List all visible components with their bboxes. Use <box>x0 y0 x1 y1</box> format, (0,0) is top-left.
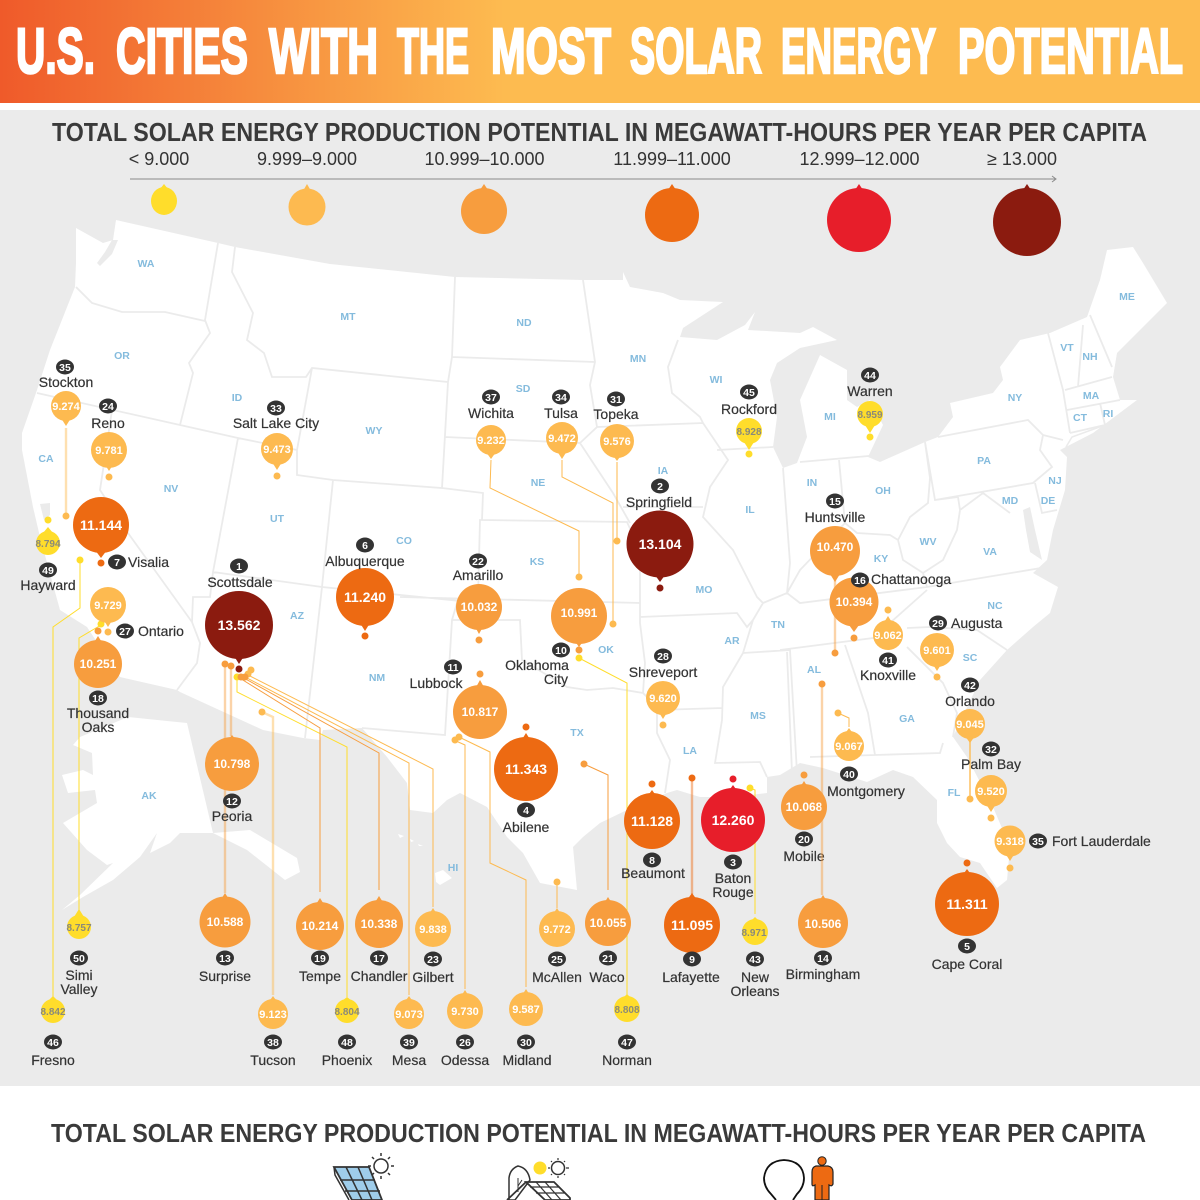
pin: 44 Warren: 8.959 <box>857 410 883 421</box>
pin: 6 Albuquerque: 11.240 <box>344 589 386 605</box>
pin: 40 Montgomery: Montgomery <box>827 783 905 799</box>
state labels: WY <box>366 425 382 437</box>
pin: 19 Tempe: 19 <box>314 953 326 965</box>
pin: 3 Baton Rouge: 12.260 <box>712 812 755 828</box>
pin: 9 Lafayette: Lafayette <box>662 969 720 985</box>
title: THE <box>397 15 469 87</box>
pin: 2 Springfield: 13.104 <box>639 536 682 552</box>
pin: 14 Birmingham: 14 <box>817 953 829 965</box>
pin: 5 Cape Coral: 11.311 <box>946 896 988 912</box>
pin: 6 Albuquerque <box>325 538 405 640</box>
pin: 33 Salt Lake City: 33 <box>270 403 282 415</box>
pin: 42 Orlando: 9.045 <box>956 719 984 731</box>
state labels: MS <box>750 710 766 722</box>
pin: 28 Shreveport: 9.620 <box>649 693 677 705</box>
pin: 26 Odessa: Odessa <box>441 1052 489 1068</box>
state labels: IN <box>807 477 817 489</box>
state labels: AR <box>724 635 740 647</box>
state labels: VA <box>983 546 997 558</box>
pin: 43 New Orleans: 8.971 <box>741 928 767 939</box>
state labels: NM <box>369 672 385 684</box>
pin: 48 Phoenix: 8.804 <box>334 1007 360 1018</box>
pin: 3 Baton Rouge: Rouge <box>712 884 754 900</box>
state labels: AK <box>141 790 157 802</box>
pin: 39 Mesa <box>244 670 426 1068</box>
state labels: MN <box>630 353 646 365</box>
pin: 15 Huntsville: 15 <box>829 496 841 508</box>
pin: 42 Orlando <box>945 678 995 802</box>
pin: 21 Waco: 21 <box>602 953 614 965</box>
pin: 37 Wichita: Wichita <box>468 405 514 421</box>
state labels: NV <box>164 483 178 495</box>
pin: 12 Peoria <box>205 662 259 824</box>
state labels: AZ <box>290 610 305 622</box>
pin: 46 Fresno: 46 <box>47 1037 59 1049</box>
pin: 45 Rockford <box>721 384 777 458</box>
pin: 12 Peoria: 10.798 <box>214 757 251 771</box>
pin: 35 Stockton <box>39 360 93 520</box>
pin: 32 Palm Bay: Palm Bay <box>961 756 1021 772</box>
pin: 48 Phoenix: Phoenix <box>322 1052 372 1068</box>
pin: 17 Chandler: Chandler <box>351 968 408 984</box>
state labels: SC <box>963 652 978 664</box>
pin: 38 Tucson <box>250 708 296 1068</box>
state labels: MI <box>824 411 836 423</box>
pin: 18 Thousand Oaks <box>67 628 129 735</box>
legend: 9.999–9.000 <box>257 149 357 169</box>
pin: 15 Huntsville: 10.470 <box>817 540 854 554</box>
pin: 43 New Orleans: Orleans <box>730 983 780 999</box>
title: WITH <box>269 15 378 87</box>
pin: 20 Mobile: Mobile <box>783 848 825 864</box>
state labels: HI <box>448 862 458 874</box>
pin: 23 Gilbert: Gilbert <box>412 969 454 985</box>
pin: 5 Cape Coral: Cape Coral <box>932 956 1002 972</box>
pin: 19 Tempe: Tempe <box>299 968 341 984</box>
pin: 3 Baton Rouge: Baton <box>715 870 751 886</box>
state labels: CT <box>1073 412 1088 424</box>
state labels <box>38 258 1135 874</box>
state labels: MD <box>1002 495 1019 507</box>
pin: 40 Montgomery <box>827 710 905 799</box>
pin: 11 Lubbock: 11 <box>447 662 459 674</box>
state labels: NE <box>531 477 545 489</box>
pin: 14 Birmingham: Birmingham <box>786 966 860 982</box>
pin: 16 Chattanooga: 16 <box>854 575 866 587</box>
pin: 43 New Orleans <box>730 784 780 999</box>
pin: 32 Palm Bay: 9.520 <box>977 786 1005 798</box>
legend: 10.999–10.000 <box>424 149 545 169</box>
state labels: VT <box>1060 342 1074 354</box>
state labels: SD <box>516 383 531 395</box>
pin: 21 Waco: 10.055 <box>590 916 627 930</box>
pin: 30 Midland <box>456 734 552 1068</box>
state labels: OH <box>875 485 891 497</box>
pin: 10 Oklahoma City: Oklahoma <box>505 657 569 673</box>
pin: 35 Stockton: Stockton <box>39 374 93 390</box>
pin: 5 Cape Coral <box>932 860 1002 972</box>
pin: 8 Beaumont: 11.128 <box>631 813 673 829</box>
state labels: NJ <box>1048 475 1062 487</box>
pin: 14 Birmingham <box>786 680 860 982</box>
pin: 26 Odessa: 9.730 <box>451 1006 479 1018</box>
pin: 37 Wichita: 9.232 <box>477 435 505 447</box>
pin: 47 Norman <box>576 654 652 1068</box>
pin: 12 Peoria: 12 <box>226 796 238 808</box>
state labels: KS <box>530 556 544 568</box>
pin: 14 Birmingham: 10.506 <box>805 917 842 931</box>
pin: 18 Thousand Oaks: Oaks <box>82 719 114 735</box>
pin: 31 Topeka: 9.576 <box>603 436 631 448</box>
state labels: UT <box>270 513 285 525</box>
pin: 28 Shreveport <box>629 648 697 728</box>
pin: 20 Mobile: 10.068 <box>786 800 823 814</box>
pin: 40 Montgomery: 40 <box>843 769 855 781</box>
pin: 15 Huntsville: Huntsville <box>805 509 866 525</box>
pin: 25 McAllen: McAllen <box>532 969 582 985</box>
pin: 45 Rockford: Rockford <box>721 401 777 417</box>
legend: < 9.000 <box>129 149 189 169</box>
state labels: AL <box>807 664 822 676</box>
pin: 12 Peoria: Peoria <box>212 808 252 824</box>
pin: 50 Simi Valley: Valley <box>60 981 98 997</box>
pin: 49 Hayward: Hayward <box>20 577 76 593</box>
state labels: PA <box>977 455 991 467</box>
pin: 16 Chattanooga <box>830 571 951 642</box>
state labels: CA <box>38 453 54 465</box>
state labels: DE <box>1041 495 1055 507</box>
pin: 6 Albuquerque: 6 <box>362 540 368 552</box>
pin: 42 Orlando: Orlando <box>945 693 995 709</box>
map: contiguous United States <box>22 220 1167 890</box>
pin: 15 Huntsville <box>805 494 866 656</box>
pin: 19 Tempe: 10.214 <box>302 919 339 933</box>
state labels: WA <box>138 258 155 270</box>
pin: 16 Chattanooga: 10.394 <box>836 595 873 609</box>
pin: 31 Topeka: Topeka <box>593 406 639 422</box>
legend: ≥ 13.000 <box>987 149 1057 169</box>
pin: 28 Shreveport: Shreveport <box>629 664 697 680</box>
pin: 46 Fresno <box>31 556 84 1068</box>
pin: 24 Reno <box>91 398 127 480</box>
pin: 17 Chandler: 10.338 <box>361 917 398 931</box>
pin: 27 Ontario: 27 <box>119 626 131 638</box>
pin: 28 Shreveport: 28 <box>657 651 669 663</box>
pin: 7 Visalia: Visalia <box>128 554 169 570</box>
pin: 33 Salt Lake City: 9.473 <box>263 444 291 456</box>
pin: 24 Reno: Reno <box>91 415 125 431</box>
pin: 30 Midland: 9.587 <box>512 1004 540 1016</box>
state labels: FL <box>948 787 961 799</box>
pin: 38 Tucson: 38 <box>267 1037 279 1049</box>
pin: 21 Waco: Waco <box>589 969 625 985</box>
icon: solar panel with sun <box>334 1153 394 1200</box>
pin: 25 McAllen: 25 <box>551 954 563 966</box>
pin: 35 Fort Lauderdale: 9.318 <box>996 836 1024 848</box>
state labels: KY <box>874 553 888 565</box>
pin: 1 Scottsdale <box>205 558 273 672</box>
pin: 9 Lafayette: 9 <box>689 954 695 966</box>
title: SOLAR <box>630 15 762 87</box>
pin: 46 Fresno: 8.842 <box>40 1007 66 1018</box>
pin: 40 Montgomery: 9.067 <box>835 741 863 753</box>
state labels: MO <box>696 584 712 596</box>
title <box>16 15 1183 87</box>
pin: 3 Baton Rouge <box>701 776 765 900</box>
pin: 49 Hayward: 49 <box>42 565 54 577</box>
icon: house with rooftop solar <box>507 1158 570 1200</box>
pin: 27 Ontario <box>90 587 184 639</box>
pin: 24 Reno: 24 <box>102 401 114 413</box>
pin: 38 Tucson: 9.123 <box>259 1009 287 1021</box>
pin: 1 Scottsdale: 13.562 <box>218 617 261 633</box>
pin: 1 Scottsdale: Scottsdale <box>207 574 273 590</box>
pin: 2 Springfield <box>626 478 694 592</box>
pin: 18 Thousand Oaks: 18 <box>92 693 104 705</box>
pin: 10 Oklahoma City: 10.991 <box>561 606 598 620</box>
pin: 4 Abilene: Abilene <box>503 819 550 835</box>
title: U.S. <box>16 15 95 87</box>
state labels: RI <box>1103 408 1113 420</box>
pin: 2 Springfield: 2 <box>657 481 663 493</box>
pin: 37 Wichita: 37 <box>485 392 497 404</box>
pin: 37 Wichita <box>468 390 582 580</box>
pin: 41 Knoxville: 41 <box>882 655 894 667</box>
pin: 18 Thousand Oaks: 10.251 <box>80 657 117 671</box>
pin: 11 Lubbock: 10.817 <box>462 705 499 719</box>
pin: 11 Lubbock: Lubbock <box>410 675 463 691</box>
pin: 48 Phoenix <box>234 674 372 1068</box>
pin: 4 Abilene: 11.343 <box>505 761 547 777</box>
icon: lightbulb and person <box>764 1157 833 1200</box>
pin: 44 Warren: Warren <box>847 383 893 399</box>
pin: 10 Oklahoma City: City <box>544 671 568 687</box>
pin: 22 Amarillo: Amarillo <box>453 567 503 583</box>
pin: 11 Lubbock <box>410 660 507 739</box>
pin: 41 Knoxville: Knoxville <box>860 667 916 683</box>
state labels: WV <box>920 536 936 548</box>
pin: 50 Simi Valley <box>60 620 104 997</box>
header banner <box>0 0 1200 103</box>
state labels: LA <box>683 745 697 757</box>
pin: 25 McAllen: 9.772 <box>543 924 571 936</box>
pin: 13 Surprise: 13 <box>219 953 231 965</box>
pin: 29 Augusta: 9.601 <box>923 645 951 657</box>
pin: 29 Augusta <box>920 615 1003 680</box>
pin: 38 Tucson: Tucson <box>250 1052 296 1068</box>
pin: 34 Tulsa: Tulsa <box>544 405 578 421</box>
pin: 25 McAllen <box>532 878 582 985</box>
pin: 39 Mesa: Mesa <box>392 1052 426 1068</box>
pin: 50 Simi Valley: Simi <box>65 967 93 983</box>
state labels: OR <box>114 350 130 362</box>
state labels: CO <box>396 535 412 547</box>
pin: 41 Knoxville: 9.062 <box>874 630 902 642</box>
pin: 22 Amarillo: 22 <box>472 556 484 568</box>
pin: 6 Albuquerque: Albuquerque <box>325 553 405 569</box>
pin: 35 Fort Lauderdale: Fort Lauderdale <box>1052 833 1151 849</box>
legend: 12.999–12.000 <box>799 149 920 169</box>
pin: 35 Fort Lauderdale <box>994 826 1151 872</box>
legend: 11.999–11.000 <box>613 149 731 169</box>
pin: 34 Tulsa: 9.472 <box>548 433 576 445</box>
pin: 18 Thousand Oaks: Thousand <box>67 705 129 721</box>
state labels: ME <box>1119 291 1135 303</box>
state labels: NY <box>1008 392 1022 404</box>
pin: 44 Warren: 44 <box>864 370 876 382</box>
pin: 47 Norman: Norman <box>602 1052 652 1068</box>
pin: 39 Mesa: 9.073 <box>395 1009 423 1021</box>
pin: 29 Augusta: Augusta <box>951 615 1003 631</box>
pin: 49 Hayward: 8.794 <box>35 539 61 550</box>
pin: 8 Beaumont: 8 <box>649 855 655 867</box>
title: CITIES <box>116 15 248 87</box>
pin: 23 Gilbert: 23 <box>427 954 439 966</box>
state labels: MT <box>340 311 356 323</box>
pin: 24 Reno: 9.781 <box>95 445 123 457</box>
pin: 49 Hayward <box>20 516 76 593</box>
pin: 31 Topeka: 31 <box>610 394 622 406</box>
pin: 7 Visalia: 7 <box>114 557 120 569</box>
pin: 16 Chattanooga: Chattanooga <box>871 571 951 587</box>
pin: 13 Surprise: Surprise <box>199 968 251 984</box>
pin: 42 Orlando: 42 <box>964 680 976 692</box>
pin: 23 Gilbert: 9.838 <box>419 924 447 936</box>
pin: 33 Salt Lake City: Salt Lake City <box>233 415 319 431</box>
pin: 20 Mobile <box>781 772 827 864</box>
state labels: NC <box>987 600 1003 612</box>
pin: 39 Mesa: 39 <box>403 1037 415 1049</box>
pin: 43 New Orleans: 43 <box>749 954 761 966</box>
pin: 44 Warren <box>847 368 893 440</box>
pin: 50 Simi Valley: 50 <box>73 953 85 965</box>
pin: 27 Ontario: Ontario <box>138 623 184 639</box>
pin: 43 New Orleans: New <box>741 969 770 985</box>
pin: 17 Chandler: 17 <box>373 953 385 965</box>
map: Hawaii <box>398 834 452 885</box>
legend <box>129 149 1061 256</box>
state labels: TN <box>771 619 785 631</box>
title: ENERGY <box>781 15 936 87</box>
pin: 4 Abilene: 4 <box>523 805 529 817</box>
state labels: IA <box>658 465 669 477</box>
pin: 9 Lafayette: 11.095 <box>671 917 713 933</box>
pin: 5 Cape Coral: 5 <box>964 941 970 953</box>
pin: 35 Stockton: 9.274 <box>52 401 81 413</box>
state labels: OK <box>598 644 614 656</box>
pin: 19 Tempe <box>238 674 344 984</box>
pin: 2 Springfield: Springfield <box>626 494 692 510</box>
pin: 9 Lafayette <box>662 774 720 985</box>
pin: 41 Knoxville <box>860 606 916 683</box>
state labels: NH <box>1082 351 1098 363</box>
pin: 47 Norman: 8.808 <box>614 1005 640 1016</box>
pin: 8 Beaumont <box>621 780 685 881</box>
pin: 10 Oklahoma City <box>505 588 607 687</box>
pin: 31 Topeka <box>593 392 639 544</box>
pin: 48 Phoenix: 48 <box>341 1037 353 1049</box>
pin: 45 Rockford: 45 <box>743 387 755 399</box>
pin: 32 Palm Bay <box>961 742 1021 822</box>
state labels: WI <box>710 374 722 386</box>
state labels: MA <box>1083 390 1100 402</box>
pin: 7 Visalia <box>73 497 169 570</box>
pin: 45 Rockford: 8.928 <box>736 427 762 438</box>
pin: 13 Surprise <box>199 660 251 984</box>
pin: 3 Baton Rouge: 3 <box>730 857 736 869</box>
pin: 17 Chandler <box>242 674 408 984</box>
pin: 32 Palm Bay: 32 <box>985 744 997 756</box>
map: Alaska <box>62 717 300 910</box>
pin: 30 Midland: 30 <box>520 1037 532 1049</box>
pin: 22 Amarillo <box>453 554 503 644</box>
pin: 29 Augusta: 29 <box>932 618 944 630</box>
pin: 1 Scottsdale: 1 <box>236 561 242 573</box>
pin: 47 Norman: 47 <box>621 1037 633 1049</box>
pin: 10 Oklahoma City: 10 <box>555 645 567 657</box>
pin: 13 Surprise: 10.588 <box>207 915 244 929</box>
pin: 34 Tulsa <box>544 390 616 628</box>
pin: 22 Amarillo: 10.032 <box>461 600 498 614</box>
pin: 34 Tulsa: 34 <box>555 392 567 404</box>
pin: 35 Fort Lauderdale: 35 <box>1032 836 1044 848</box>
pin: 50 Simi Valley: 8.757 <box>66 923 92 934</box>
state labels: ID <box>232 392 243 404</box>
pin: 8 Beaumont: Beaumont <box>621 865 685 881</box>
pin: 26 Odessa <box>441 736 489 1068</box>
pin: 7 Visalia: 11.144 <box>80 517 122 533</box>
title: MOST <box>491 15 611 87</box>
state labels: ND <box>516 317 532 329</box>
pin: 20 Mobile: 20 <box>798 834 810 846</box>
pin: 4 Abilene <box>494 724 558 835</box>
pin: 26 Odessa: 26 <box>459 1037 471 1049</box>
pin: 23 Gilbert <box>248 666 454 985</box>
pin: 21 Waco <box>580 760 631 985</box>
pin: 46 Fresno: Fresno <box>31 1052 75 1068</box>
state labels: IL <box>745 504 755 516</box>
pin: 35 Stockton: 35 <box>59 362 71 374</box>
pin: 30 Midland: Midland <box>502 1052 552 1068</box>
pin: 33 Salt Lake City <box>233 400 319 480</box>
pin: 27 Ontario: 9.729 <box>94 600 122 612</box>
state labels: GA <box>899 713 915 725</box>
state labels: TX <box>570 727 584 739</box>
